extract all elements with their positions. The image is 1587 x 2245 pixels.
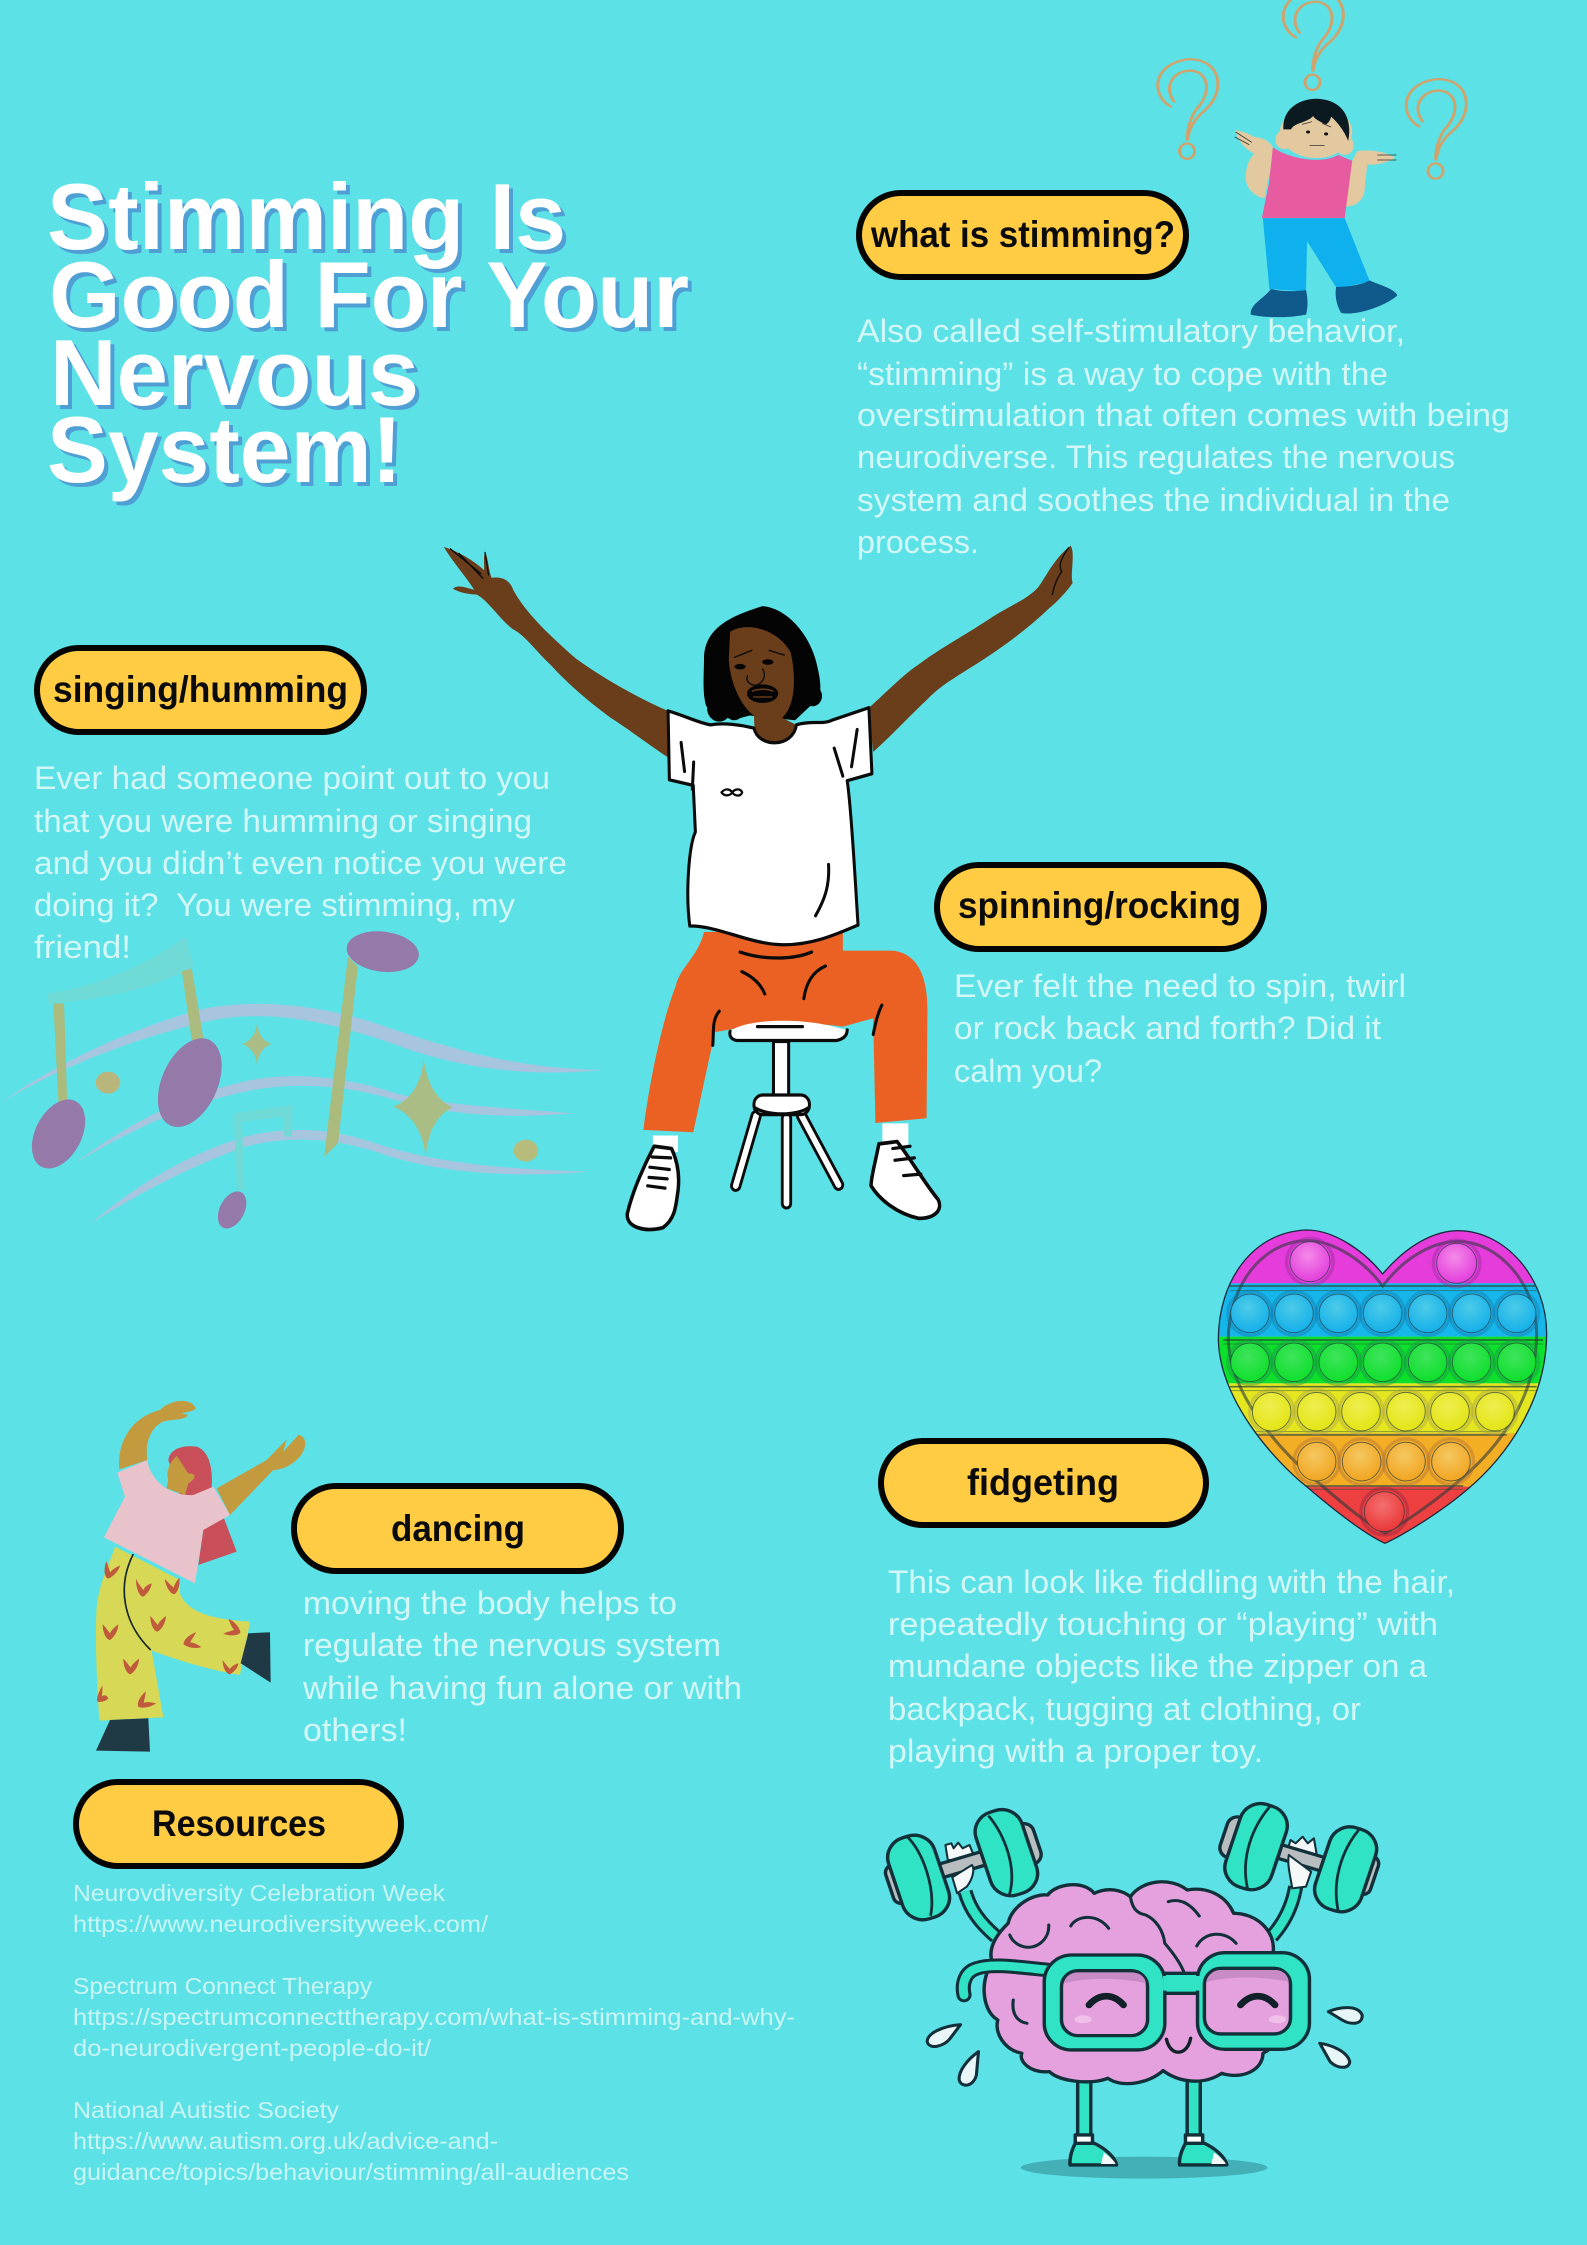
person — [1235, 99, 1397, 317]
heading pill: Resources — [152, 1803, 326, 1844]
heading pill — [76, 1782, 401, 1866]
bubble rings — [1228, 1238, 1539, 1535]
text block: process. — [857, 524, 979, 560]
heading pill: fidgeting — [967, 1462, 1119, 1503]
sweat drops — [927, 2008, 1362, 2085]
resource list — [73, 1880, 795, 2185]
heading pill — [37, 648, 364, 732]
text block: repeatedly touching or “playing” with — [888, 1606, 1438, 1642]
panel: dancing — [294, 1486, 742, 1748]
heading pill: singing/humming — [53, 669, 348, 710]
title: Stimming Is — [47, 164, 566, 269]
text block: overstimulation that often comes with being — [857, 397, 1510, 433]
text block — [857, 313, 1510, 560]
title: Good For Your — [49, 242, 689, 347]
resource list: Spectrum Connect Therapy — [73, 1973, 373, 1999]
text block: system and soothes the individual in the — [857, 482, 1450, 518]
sneakers — [627, 1123, 940, 1229]
face — [1075, 1996, 1286, 2052]
text block: backpack, tugging at clothing, or — [888, 1691, 1361, 1727]
heading pill: spinning/rocking — [958, 885, 1241, 926]
icon: confused person with question marks — [1158, 0, 1466, 317]
text block: “stimming” is a way to cope with the — [857, 356, 1388, 392]
question mark right — [1406, 79, 1466, 179]
icon: rainbow pop-it heart — [1210, 1220, 1557, 1550]
white t-shirt — [668, 708, 872, 945]
resource list: National Autistic Society — [73, 2097, 340, 2123]
text block: Ever had someone point out to you — [34, 760, 550, 796]
icon: woman with raised arms on stool — [444, 546, 1073, 1229]
text block: calm you? — [954, 1053, 1102, 1089]
panel: spinning/rocking — [937, 865, 1406, 1089]
text block: Also called self-stimulatory behavior, — [857, 313, 1405, 349]
text block: while having fun alone or with — [302, 1670, 742, 1706]
text block: Ever felt the need to spin, twirl — [954, 968, 1406, 1004]
text block — [888, 1564, 1455, 1769]
text block: and you didn’t even notice you were — [34, 845, 567, 881]
title — [47, 164, 689, 502]
panel: fidgeting — [881, 1441, 1455, 1769]
panel: singing/humming — [34, 648, 567, 965]
icon: dancing person — [94, 1401, 305, 1752]
resource list: guidance/topics/behaviour/stimming/all-audiences — [73, 2159, 629, 2185]
left dumbbell — [882, 1804, 1044, 1925]
question mark top — [1283, 0, 1343, 90]
heading pill — [294, 1486, 621, 1571]
colour bands — [1219, 1230, 1546, 1542]
question mark left — [1158, 59, 1218, 159]
text block: doing it? You were stimming, my — [34, 887, 515, 923]
title: Nervous — [50, 320, 419, 425]
heading pill: dancing — [391, 1508, 525, 1549]
text block: This can look like fiddling with the hair, — [888, 1564, 1455, 1600]
panel: resources — [73, 1782, 795, 2185]
pop bubbles — [1231, 1242, 1536, 1532]
text block: playing with a proper toy. — [888, 1733, 1263, 1769]
brain body — [984, 1882, 1287, 2084]
arms — [965, 1887, 1296, 1937]
text block: moving the body helps to — [303, 1585, 677, 1621]
glasses — [963, 1953, 1309, 2050]
heading pill — [937, 865, 1264, 949]
text block: friend! — [34, 929, 131, 965]
head and hair — [704, 606, 822, 747]
text block — [954, 968, 1406, 1089]
resource list: https://www.autism.org.uk/advice-and- — [73, 2128, 498, 2154]
text block: regulate the nervous system — [303, 1627, 721, 1663]
text block: neurodiverse. This regulates the nervous — [857, 439, 1455, 475]
resource list: do-neurodivergent-people-do-it/ — [73, 2035, 432, 2061]
panel: what is stimming — [857, 193, 1510, 560]
resource list: https://www.neurodiversityweek.com/ — [73, 1911, 489, 1937]
resource list: https://spectrumconnecttherapy.com/what-is-stimming-and-why- — [73, 2004, 795, 2030]
text block — [302, 1585, 742, 1748]
right dumbbell — [1217, 1798, 1382, 1917]
icon: brain lifting dumbbells — [882, 1798, 1382, 2179]
title: System! — [47, 397, 402, 502]
heart outline — [1218, 1230, 1547, 1543]
legs and shoes — [1070, 2073, 1227, 2165]
arms — [444, 546, 1073, 760]
text block: mundane objects like the zipper on a — [888, 1648, 1427, 1684]
heading pill — [859, 193, 1186, 277]
text block: others! — [303, 1712, 407, 1748]
text block: or rock back and forth? Did it — [954, 1010, 1381, 1046]
text block: that you were humming or singing — [34, 803, 532, 839]
orange trousers — [643, 930, 927, 1132]
heading pill: what is stimming? — [870, 214, 1175, 255]
resource list: Neurovdiversity Celebration Week — [73, 1880, 446, 1906]
text block — [34, 760, 567, 965]
heading pill — [881, 1441, 1206, 1525]
icon: music notes and staves — [0, 927, 603, 1232]
stool — [730, 1021, 847, 1204]
ground shadow — [1021, 2157, 1267, 2179]
